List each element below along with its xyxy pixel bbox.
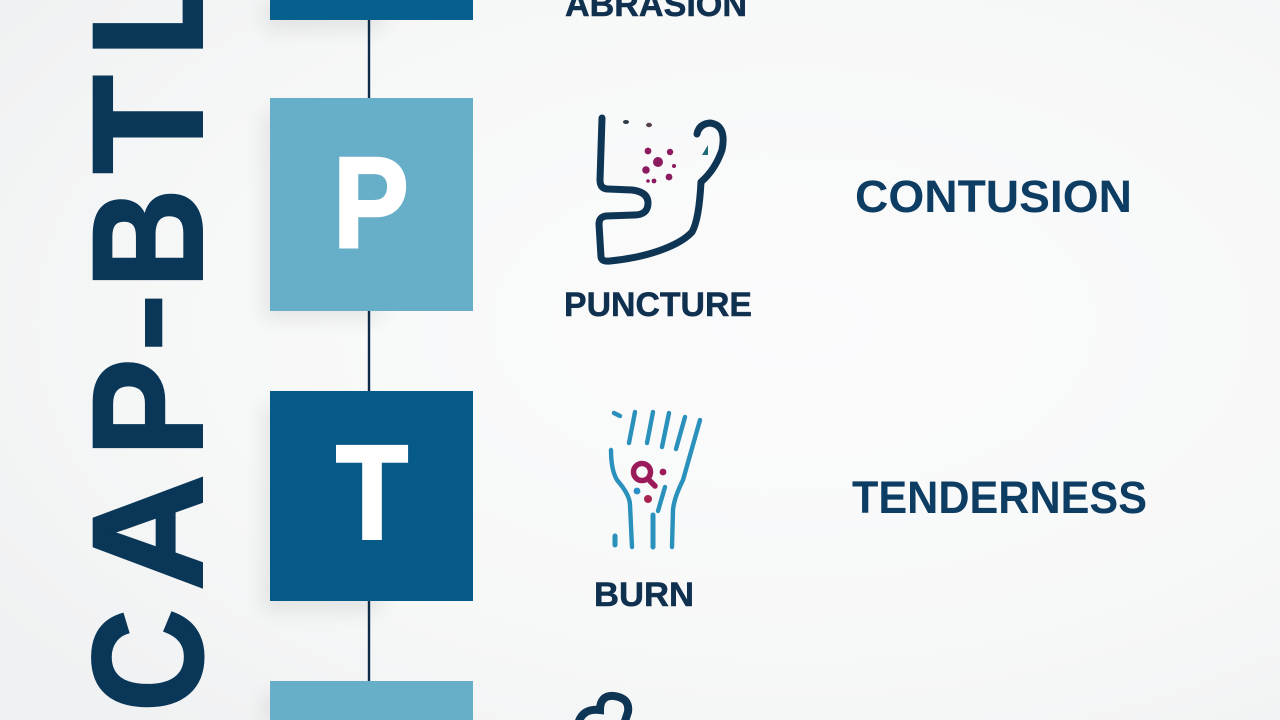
label: contusion: CONTUSION	[855, 171, 1132, 222]
square: letter P: P	[333, 130, 409, 275]
icon: bottom, cropped cloud shape	[578, 696, 628, 720]
vertical title: CAP-BTL: A	[61, 474, 235, 590]
vertical title: CAP-BTL: -	[74, 293, 213, 352]
vertical title: CAP-BTL	[60, 0, 236, 712]
label: puncture: PUNCTURE	[564, 286, 752, 324]
connector lines	[368, 20, 370, 681]
vertical title: CAP-BTL: C	[60, 609, 235, 712]
label: burn: BURN	[594, 576, 694, 614]
square: top, cropped	[270, 0, 473, 20]
icon: burn, hand	[611, 412, 700, 547]
square: letter T: T	[336, 417, 408, 567]
icon: puncture, face profile	[599, 118, 723, 261]
vertical title: CAP-BTL: P	[61, 359, 236, 456]
square shadows	[262, 0, 384, 720]
square: letter P	[270, 98, 473, 311]
vertical title: CAP-BTL: B	[61, 189, 235, 288]
vertical title: CAP-BTL: T	[61, 75, 235, 174]
square: bottom, cropped	[270, 681, 473, 720]
square: letter T	[270, 391, 473, 601]
label: tenderness: TENDERNESS	[852, 472, 1147, 523]
